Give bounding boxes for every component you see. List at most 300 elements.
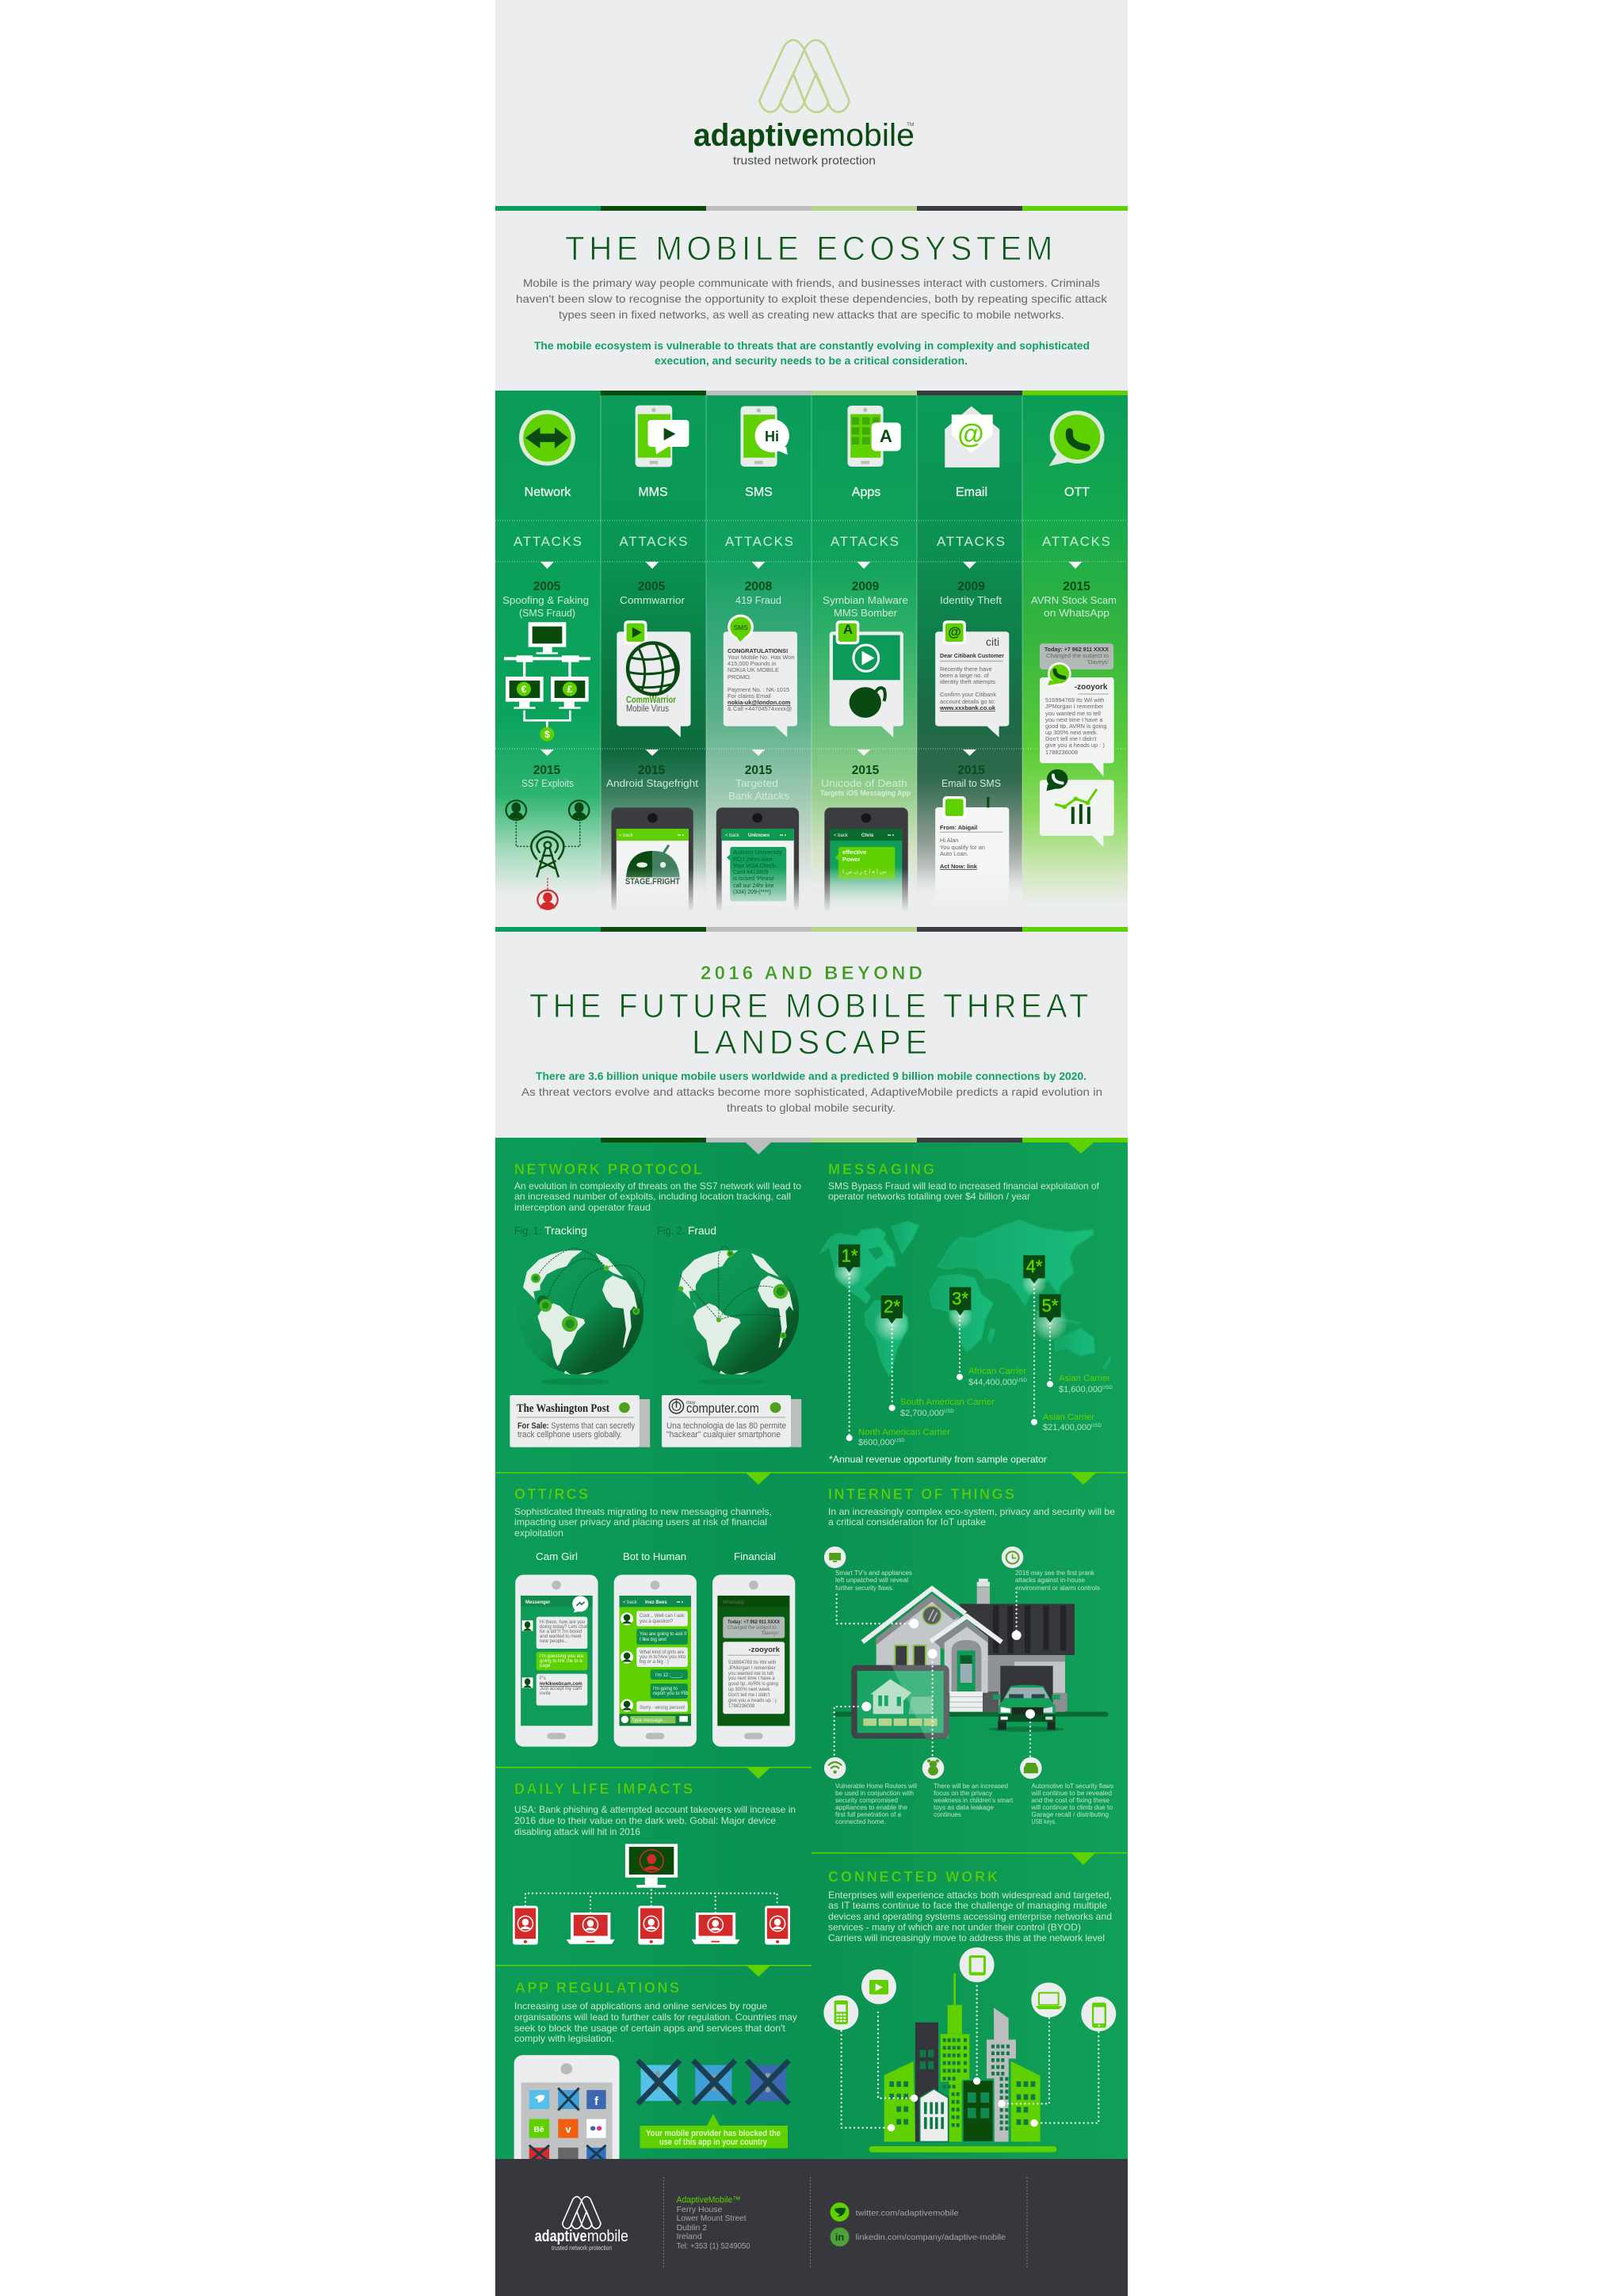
address: AdaptiveMobile™ [677, 2195, 741, 2205]
heading: DAILY LIFE IMPACTS [514, 1781, 693, 1797]
phone: cam girl [515, 1575, 598, 1747]
connectors [525, 1888, 777, 1913]
icon letters: Hi [765, 429, 779, 444]
citi text: Recently there have [940, 666, 992, 673]
carrier labels [858, 1367, 1113, 1447]
intro text: Mobile is the primary way people communicate with friends, and businesses interact with customers. Criminals [523, 277, 1100, 289]
carrier labels: South American Carrier [900, 1398, 995, 1407]
bot chat: I'm 12 ;____; [655, 1673, 683, 1678]
press card: washington post [510, 1395, 650, 1447]
press card text: Una technologia de las 80 permite [666, 1421, 786, 1431]
email bubble: identity theft [935, 620, 1009, 738]
years 2015: 2015 [852, 764, 880, 777]
iot bottom captions: weakness in children's smart [933, 1797, 1014, 1804]
first attack years and names: 2008 [745, 580, 773, 593]
icon: laptop [1031, 1982, 1066, 2017]
financial chat: JPMorgan I remember [728, 1666, 776, 1671]
carrier labels: USD [1017, 1379, 1028, 1383]
cam girl chat: F's [540, 1676, 546, 1681]
first attack years and names: 2005 [638, 580, 666, 593]
citi text: been a large no. of [940, 672, 990, 679]
text: services - many of which are not under their control (BYOD) [828, 1922, 1081, 1933]
sms text [727, 647, 795, 712]
carrier labels: Asian Carrier [1043, 1413, 1094, 1422]
commwarrior label: CommWarrior [626, 694, 676, 705]
citi text: www.xxxbank.co.uk [939, 704, 996, 711]
whatsapp scam text: -zooyork [1075, 683, 1108, 692]
pin numbers [842, 1246, 1059, 1317]
column labels: Apps [852, 486, 880, 499]
financial chat: Don't tell me I didn't [728, 1693, 770, 1698]
fig captions: Fraud [688, 1224, 716, 1237]
citi text [939, 635, 1004, 711]
pin dots [846, 1374, 1053, 1441]
green tower [941, 1974, 969, 2142]
column labels [525, 486, 1090, 499]
financial chat [723, 1600, 781, 1709]
whatsapp scam text [1044, 646, 1109, 756]
bot chat: I'm going to [653, 1687, 678, 1691]
SS7 exploit diagram [506, 800, 589, 910]
cam girl chat: I'm guessing you are [540, 1654, 584, 1659]
first attack years and names: 2009 [957, 580, 985, 593]
pin flags [838, 1245, 1061, 1324]
text: USA: Bank phishing & attempted account takeovers will increase in [514, 1804, 796, 1815]
bank sms text: (334) 209-(****) [733, 890, 771, 895]
years 2015: 2015 [957, 764, 985, 777]
cam girl chat: and wanted to meet [540, 1634, 582, 1639]
phone header text: < back [725, 833, 740, 838]
header: logo [693, 40, 915, 168]
device network diagram [513, 1844, 790, 1945]
text: 2016 due to their value on the dark web. Gobal: Major device [514, 1815, 776, 1826]
iot top captions [835, 1569, 1100, 1592]
social: linkedin [831, 2228, 1006, 2247]
bank sms text: Card #413809 [733, 870, 768, 875]
text: an increased number of exploits, including location tracking, call [514, 1191, 791, 1202]
citi text: Dear Citibank Customer [940, 652, 1004, 659]
years 2015: 2015 [745, 764, 773, 777]
citi text: citi [986, 635, 999, 648]
press card text: "hackear" cualquier smartphone [666, 1430, 781, 1440]
citi text: Confirm your Citibank [940, 691, 996, 698]
attack names: SS7 Exploits [521, 777, 574, 789]
title: THE FUTURE MOBILE THREAT [529, 987, 1093, 1025]
tablet [851, 1665, 949, 1738]
whatsapp scam text: Today: +7 962 911 XXXX [1044, 646, 1109, 653]
bank sms text [733, 850, 783, 895]
icon: network arrows [519, 410, 575, 466]
bot chat: I like big and [640, 1638, 666, 1642]
globe 2: fraud [674, 1246, 799, 1385]
wordmark: adaptive [693, 118, 819, 153]
dark roof [959, 1604, 1075, 1655]
first attack years and names: Symbian Malware [823, 594, 908, 606]
first attack years and names: 2015 [1063, 580, 1090, 593]
colour bar 1 [495, 206, 1128, 211]
years 2015 [533, 764, 985, 777]
panel: network protocol [510, 1161, 801, 1447]
intro highlight [534, 340, 1090, 367]
phone screen text [525, 1600, 781, 1723]
pin numbers: 2* [884, 1296, 900, 1317]
text: SMS Bypass Fraud will lead to increased financial exploitation of [828, 1180, 1100, 1192]
text: An evolution in complexity of threats on the SS7 network will lead to [514, 1180, 801, 1192]
text [514, 1506, 772, 1539]
dark green block [963, 2081, 993, 2142]
icon: tablet [960, 1947, 995, 1982]
MMS bubble: commwarrior [617, 620, 691, 738]
phone: stagefright [611, 807, 693, 913]
phone header text: Unknown [748, 833, 769, 838]
kicker: 2016 AND BEYOND [701, 963, 922, 984]
right wall [983, 1655, 1067, 1712]
carrier labels: North American Carrier [858, 1428, 950, 1437]
iot bottom captions: USB keys. [1032, 1818, 1056, 1825]
intro text [516, 277, 1108, 321]
unicode message text: Power [842, 856, 861, 863]
heading: NETWORK PROTOCOL [514, 1161, 702, 1177]
dividers and notch arrows [495, 1472, 1128, 1977]
bank sms text: call our 24hr line [733, 883, 773, 889]
carrier labels: $1,600,000 [1059, 1385, 1102, 1394]
heading: INTERNET OF THINGS [828, 1486, 1014, 1502]
press card text: The Washington Post [517, 1402, 609, 1415]
connector dots [861, 1619, 1035, 1718]
title: THE MOBILE ECOSYSTEM [565, 230, 1057, 268]
pin numbers: 4* [1026, 1257, 1043, 1276]
iot top captions: Smart TV's and appliances [835, 1569, 912, 1577]
fig captions: Fig. 1. [514, 1224, 541, 1237]
panel: daily life impacts [513, 1781, 796, 1945]
round window [922, 1606, 941, 1625]
first attack years and names: 2005 [533, 580, 561, 593]
email to sms text: Hi Alan [940, 837, 958, 844]
dark tower [915, 2023, 938, 2142]
title [529, 987, 1093, 1062]
phone header text: Chris [861, 833, 874, 838]
icon: SMS phone [741, 406, 789, 467]
intro text: haven't been slow to recognise the opportunity to exploit these dependencies, both by repeating specific attack [516, 292, 1108, 305]
connector lines [842, 1986, 1098, 2128]
attack names: Targets iOS Messaging App [820, 789, 911, 797]
highlight: There are 3.6 billion unique mobile users worldwide and a predicted 9 billion mobile connections by 2020. [536, 1070, 1086, 1082]
drop lines [850, 1274, 1050, 1438]
blocked message [640, 2114, 788, 2149]
whatsapp scam text: give you a heads up : ) [1045, 742, 1105, 749]
iot top captions: 2016 may see the first prank [1015, 1569, 1095, 1577]
iot bottom captions: appliances to enable the [835, 1804, 908, 1811]
cam girl chat: new people... [540, 1639, 568, 1644]
financial chat: -zooyork [748, 1646, 781, 1654]
text [514, 2000, 797, 2044]
tablet icon letters: v [565, 2123, 571, 2135]
address: Tel: +353 (1) 5249050 [677, 2241, 750, 2251]
press card text: muy [686, 1401, 695, 1405]
bot chat [623, 1600, 689, 1723]
carrier labels: USD [895, 1439, 905, 1444]
sms text: nokia-uk@london.com [727, 699, 791, 706]
bot chat: Inez Bees [645, 1600, 667, 1605]
connector lines [834, 1592, 1030, 1756]
citi text: identity theft attempts [940, 678, 996, 685]
phone: financial [712, 1575, 795, 1747]
text: Enterprises will experience attacks both widespread and targeted, [828, 1890, 1112, 1901]
whatsapp scam text: you wanted me to tell [1045, 710, 1101, 717]
column labels: Email [956, 486, 987, 499]
logo mark [759, 40, 850, 113]
address: Ireland [677, 2232, 702, 2241]
address [677, 2195, 750, 2251]
column labels: OTT [1064, 486, 1090, 499]
phone captions: Bot to Human [623, 1550, 686, 1562]
victim phones [513, 1906, 790, 1945]
fade to light [601, 868, 1022, 927]
text: Increasing use of applications and online services by rogue [514, 2000, 767, 2012]
iot bottom captions: and the cost of fixing these [1032, 1797, 1110, 1804]
carrier labels: $600,000 [858, 1438, 895, 1447]
attack names: Unicode of Death [821, 777, 907, 789]
text [828, 1506, 1115, 1527]
tablet icon letters: Bē [534, 2126, 544, 2134]
first attack years and names: 419 Fraud [735, 594, 781, 606]
iot bottom captions: will continue to be revealed [1030, 1790, 1112, 1797]
first attack bubble text [521, 622, 1109, 756]
iot icons [824, 1547, 1042, 1779]
carrier labels: $21,400,000 [1043, 1423, 1091, 1432]
footer wordmark: adaptive [535, 2228, 587, 2245]
email to sms text: You qualify for an [940, 844, 985, 851]
car [988, 1685, 1064, 1732]
press card text: computer.com [686, 1401, 759, 1416]
sms text: & Call +44704574xxxx@ [727, 705, 792, 712]
down arrows [540, 562, 1083, 756]
right wing [1011, 2061, 1041, 2142]
bubble: email to sms [935, 796, 1009, 913]
ground [834, 1712, 1108, 1717]
phone header text [619, 833, 894, 838]
roof shadow [876, 1594, 960, 1645]
financial chat: Today: +7 962 911 XXXX [727, 1620, 780, 1625]
globe 1: tracking [517, 1248, 644, 1385]
bot chat: you in to?Are you into [640, 1655, 686, 1660]
financial chat: Whatsapp [723, 1600, 745, 1605]
phones [515, 1575, 795, 1747]
attack names: Email to SMS [941, 777, 1001, 789]
cam girl chat: for a bit!?! I'm bored [540, 1630, 582, 1634]
unicode message text: effective [842, 849, 866, 856]
icon: teddy [922, 1757, 944, 1779]
iot bottom captions: toys as data leakage [934, 1804, 995, 1811]
iot bottom captions: first full penetration of a [835, 1811, 902, 1818]
panel: connected work [823, 1869, 1116, 2153]
phone header text: < back [619, 833, 634, 838]
text: threats to global mobile security. [727, 1101, 896, 1114]
whatsapp scam text: Don't tell me I didn't [1045, 735, 1096, 742]
white building [920, 2089, 949, 2142]
stagefright logo text: STAGE.FRIGHT [625, 877, 680, 887]
attacks labels: ATTACKS [620, 534, 688, 549]
cam girl chat: page [540, 1664, 551, 1669]
icon letters: @ [957, 419, 984, 449]
network diagram [504, 622, 590, 742]
phone header text: •• • [888, 833, 894, 838]
icon: wifi [824, 1757, 846, 1779]
iot bottom captions [835, 1783, 1113, 1825]
footer tagline: trusted network protection [552, 2245, 612, 2252]
first attack years and names: Identity Theft [940, 594, 1002, 606]
commwarrior label: Mobile Virus [626, 703, 669, 714]
title: LANDSCAPE [692, 1024, 932, 1062]
press card: muy computer [662, 1395, 801, 1447]
cam girl chat [525, 1600, 588, 1696]
victim laptops [567, 1913, 739, 1944]
intro highlight: The mobile ecosystem is vulnerable to threats that are constantly evolving in complexity and sophisticated [534, 340, 1090, 352]
heading: OTT/RCS [514, 1486, 588, 1502]
sms text: 415,000 Pounds in [727, 660, 777, 667]
pin numbers: 1* [842, 1246, 858, 1266]
first attack years and names: Commwarrior [620, 594, 685, 606]
carrier labels: USD [1102, 1386, 1113, 1390]
icon: keypad phone [823, 1995, 858, 2030]
social: twitter [831, 2203, 959, 2222]
phone header text: < back [834, 833, 849, 838]
bot chat: Sorry - wrong person! [640, 1706, 685, 1711]
financial chat: 516994769 Its Wil with [728, 1661, 776, 1665]
cam girl chat: doing today? Lets chat [540, 1625, 588, 1630]
front gable wall [934, 1620, 988, 1693]
section: future threat landscape intro [521, 963, 1102, 1114]
text: operator networks totalling over $4 billion / year [828, 1191, 1030, 1202]
iot top captions: further security flaws. [835, 1585, 894, 1592]
text [521, 1085, 1102, 1114]
iot bottom captions: Vulnerable Home Routers will [835, 1783, 917, 1790]
whatsapp scam text: 'Daveys' [1087, 658, 1109, 666]
bot chat: big or a big : ) [640, 1660, 669, 1665]
attacks labels: ATTACKS [1042, 534, 1110, 549]
bot chat: Cool... Well can I ask [640, 1614, 685, 1619]
social: linkedin: linkedin.com/company/adaptive-mobile [856, 2233, 1006, 2242]
house illustration [834, 1579, 1108, 1756]
network currency symbols: $ [544, 729, 550, 740]
cam girl chat: Hi there, how are you [540, 1620, 585, 1625]
bot chat: •• • [677, 1600, 683, 1605]
commwarrior label [626, 694, 676, 714]
attack names: Targeted [735, 777, 778, 789]
email to sms text: Auto Loan. [940, 850, 968, 857]
first attack years and names: MMS Bomber [834, 607, 898, 619]
cam girl chat: mrkikwebcam.com [540, 1682, 582, 1687]
iot bottom captions: be used in conjunction with [835, 1790, 914, 1797]
network currency symbols: € [521, 684, 527, 695]
world map [820, 1220, 1111, 1441]
carrier labels: $2,700,000 [900, 1409, 944, 1418]
fig captions: Fig. 2. [657, 1224, 685, 1237]
footer [495, 2159, 1128, 2296]
unicode message text [842, 849, 886, 875]
section: the mobile ecosystem intro [516, 230, 1108, 367]
bank sms text: is locked 'Please [733, 876, 774, 882]
cam girl chat: invite [540, 1691, 552, 1696]
blocked message: use of this app in your country [659, 2138, 768, 2147]
carrier labels: Asian Carrier [1059, 1374, 1110, 1383]
iot bottom captions: continues [934, 1811, 961, 1818]
text [514, 1804, 796, 1837]
first attack years and names: Spoofing & Faking [502, 594, 589, 606]
panel: messaging [820, 1161, 1113, 1465]
bank sms text: Your VISA Check [733, 864, 776, 869]
page background column [495, 0, 1128, 2296]
network currency symbols: £ [567, 684, 573, 695]
social: twitter: twitter.com/adaptivemobile [856, 2209, 959, 2218]
pin numbers: 5* [1042, 1296, 1059, 1315]
main wall [876, 1599, 960, 1693]
sms text: NOKIA UK MOBILE [727, 666, 779, 673]
carrier labels: USD [944, 1409, 954, 1414]
phone: unicode of death [824, 807, 908, 913]
financial chat: you wanted me to tell [728, 1672, 773, 1676]
column labels: Network [525, 486, 571, 499]
iot bottom captions: focus on the privacy [934, 1790, 992, 1797]
bot chat: < back [623, 1600, 638, 1605]
years 2015: 2015 [533, 764, 561, 777]
financial chat: give you a heads up : ) [728, 1699, 777, 1703]
whatsapp scam text: Changed the subject to [1046, 652, 1109, 659]
address: Ferry House [677, 2205, 723, 2214]
phone: bank attacks [716, 807, 799, 913]
financial chat: up 300% next week. [728, 1688, 771, 1692]
icon: MMS phone [636, 406, 689, 467]
iot top captions: attacks against in-house [1015, 1577, 1086, 1584]
windows [895, 1646, 926, 1666]
icon: smart tv [824, 1547, 846, 1568]
six attack-vector columns background [495, 391, 1128, 927]
attack names: Bank Attacks [728, 790, 790, 802]
sms text: For claims Email [727, 692, 771, 700]
phone: bot to human [614, 1575, 697, 1747]
city illustration [823, 1947, 1116, 2153]
panel: OTT/RCS [514, 1486, 795, 1747]
fig captions [514, 1224, 716, 1237]
sms text: PROMO. [727, 673, 751, 681]
sms text: Your Mobile No. Has Won [727, 654, 795, 661]
press card text [517, 1401, 786, 1440]
email badge: @ [948, 624, 961, 639]
blocked message: Your mobile provider has blocked the [646, 2129, 781, 2138]
iot bottom captions: Garage recall / distributing [1032, 1811, 1109, 1818]
sms text: CONGRATULATIONS! [727, 647, 788, 654]
sms badge: SMS [733, 624, 748, 631]
green panels background [495, 1142, 1128, 2159]
grey tower [987, 2008, 1016, 2142]
text: As threat vectors evolve and attacks become more sophisticated, AdaptiveMobile predicts a rapid evolution in [521, 1085, 1102, 1098]
SMS bubble: 419 fraud [724, 615, 797, 738]
footer wordmark: mobile [587, 2228, 628, 2245]
icon: video [861, 1970, 896, 2004]
bubble: stock chart [1040, 769, 1114, 847]
financial chat: you next time I have a [728, 1676, 775, 1681]
base [869, 2146, 1056, 2153]
trademark: TM [907, 122, 914, 128]
address: Lower Mount Street [677, 2214, 747, 2223]
second attack text [521, 764, 1001, 895]
text: exploitation [514, 1527, 563, 1539]
fig captions: Tracking [544, 1224, 587, 1237]
icon: car [1020, 1757, 1042, 1779]
column labels: MMS [638, 486, 668, 499]
connector dots [888, 2077, 1038, 2131]
tablet with app grid [514, 2055, 620, 2172]
